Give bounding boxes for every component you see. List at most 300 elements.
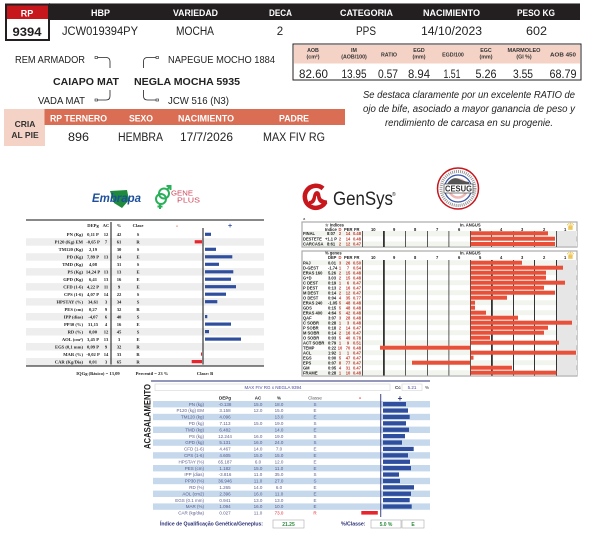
RP badge: RP: [21, 8, 33, 18]
chart: Embrapa Geneplus evaluation: S: [137, 300, 140, 304]
chart: GenSys panel two: 10: [371, 255, 376, 260]
chart: Embrapa Geneplus evaluation: +: [228, 223, 232, 230]
chart: mating projection: 65.187: [218, 459, 232, 464]
chart: mating projection: 5.131: [219, 440, 231, 445]
chart: mating projection: S: [313, 434, 317, 439]
chart: GenSys panel two: TEMP: [303, 345, 315, 350]
chart: GenSys panel two: 0.48: [353, 370, 362, 375]
chart: Embrapa Geneplus evaluation: 4,07 P: [87, 292, 99, 297]
panel: cria al pie: RP TERNERO: [50, 114, 107, 124]
chart: GenSys panel two: ♛: [566, 251, 575, 262]
panel: carcass measurements table: AOB 450: [550, 52, 576, 58]
chart: Embrapa Geneplus evaluation: 32: [117, 307, 122, 312]
chart: GenSys panel two: 2: [339, 275, 342, 280]
chart: mating projection: -0.138: [219, 402, 232, 407]
chart: GenSys panel one: FR: [354, 227, 360, 232]
chart: GenSys panel one: In. ANGUS: [460, 222, 481, 228]
mating chart footer: E: [411, 522, 415, 528]
chart: GenSys panel two: -1.05: [328, 300, 338, 305]
chart: mating projection: PP30 (%): [185, 479, 204, 484]
chart: GenSys panel two: 7: [347, 265, 350, 270]
chart: Embrapa Geneplus evaluation: 3,45 P: [87, 337, 99, 342]
panel: carcass measurements table: [293, 44, 581, 81]
chart: mating projection: [151, 380, 430, 517]
chart: Embrapa Geneplus evaluation: TM120 (Kg): [59, 247, 83, 252]
chart: Embrapa Geneplus evaluation: 13: [104, 254, 109, 260]
chart: GenSys panel two: 0:00: [328, 355, 337, 360]
chart: mating projection: 19.0: [275, 434, 284, 439]
chart: Embrapa Geneplus evaluation: 22: [117, 292, 122, 297]
chart: GenSys panel two: 1:92: [328, 350, 337, 355]
chart: Embrapa Geneplus evaluation: 13: [117, 270, 122, 274]
chart: Embrapa Geneplus evaluation: 4,08: [89, 262, 98, 267]
RP badge: [6, 4, 49, 40]
chart: GenSys panel two: 3:07: [328, 315, 337, 320]
chart: Embrapa Geneplus evaluation: 7: [105, 240, 108, 244]
chart: Embrapa Geneplus evaluation: PS (Kg): [68, 270, 83, 274]
chart: GenSys panel two: ERAS 160: [303, 270, 323, 275]
chart: Embrapa Geneplus evaluation: AC: [103, 223, 109, 228]
chart: Embrapa Geneplus evaluation: -0,65 P: [86, 240, 100, 244]
panel: carcass measurements table: 13.95: [342, 67, 367, 81]
chart: GenSys panel two: 2: [339, 325, 342, 330]
chart: GenSys panel two: DEP: [328, 255, 337, 260]
panel: carcass measurements table: (mm): [413, 54, 426, 60]
text block: note: ojo de bife, asociado a mayor ganancia de peso y: [363, 104, 576, 115]
chart: GenSys panel one: 0.47: [353, 242, 362, 247]
chart: GenSys panel two: 0.54: [353, 265, 362, 270]
chart: mating projection: TM120 (kg): [181, 415, 204, 420]
chart: GenSys panel two: 48: [346, 300, 351, 305]
chart: mating projection: 6.482: [219, 427, 231, 432]
logo: GenSys: ®: [392, 191, 396, 198]
pedigree: REM ARMADOR: [15, 54, 85, 66]
chart: Embrapa Geneplus evaluation: IQGg (Básico) = 13,09: [76, 371, 120, 376]
chart: mating projection: 16.0: [254, 491, 263, 496]
chart: GenSys panel one: FINAL: [303, 231, 316, 236]
chart: Embrapa Geneplus evaluation: 3: [118, 337, 121, 342]
chart: Embrapa Geneplus evaluation: 13: [104, 270, 109, 274]
panel: carcass measurements table: (cm²): [307, 54, 320, 60]
chart: mating projection: 1.094: [219, 504, 231, 509]
chart: mating projection: 27.0: [275, 479, 284, 484]
chart: GenSys panel one: 2: [543, 227, 546, 232]
chart: mating projection: P120 (kg) EM: [176, 408, 204, 413]
panel: carcass measurements table: (AOB/100): [341, 54, 367, 60]
chart: GenSys panel one: DESTETE: [303, 236, 322, 241]
chart: mating projection: S: [313, 421, 317, 426]
chart: mating projection: 12.0: [275, 459, 284, 464]
chart: mating projection: 11.0: [254, 479, 263, 484]
chart: GenSys panel two: PER: [344, 255, 352, 260]
chart: GenSys panel two: 0:13: [328, 285, 337, 290]
chart: Embrapa Geneplus evaluation: 31: [117, 262, 122, 267]
chart: GenSys panel two: FRAME: [303, 370, 318, 375]
chart: mating projection: -3.816: [219, 472, 232, 477]
chart: Embrapa Geneplus evaluation: PP30 (%): [64, 322, 83, 327]
chart: GenSys panel two: 0.47: [353, 365, 362, 370]
chart: Embrapa Geneplus evaluation: PES (cm): [64, 307, 83, 312]
heading: acasalamento: ACASALAMENTO: [142, 384, 154, 449]
panel: carcass measurements table: RATIO: [381, 52, 397, 58]
panel: carcass measurements table: IM: [351, 48, 358, 54]
chart: mating projection: 16.0: [254, 504, 263, 509]
chart: mating projection: 73.0: [275, 511, 284, 516]
panel: carcass measurements table: EGD: [413, 48, 425, 54]
chart: Embrapa Geneplus evaluation: P120 (Kg) EM: [55, 240, 84, 244]
chart: Embrapa Geneplus evaluation: IPP (dias): [64, 314, 83, 320]
chart: Embrapa Geneplus evaluation: 0,01: [89, 360, 98, 364]
chart: Embrapa Geneplus evaluation: S: [137, 232, 140, 237]
chart: Embrapa Geneplus evaluation: 14: [104, 352, 109, 357]
chart: GenSys panel two: 2: [339, 270, 342, 275]
header bar: PESO KG: [517, 8, 555, 18]
chart: mating projection: HPSTAY (%): [178, 459, 204, 464]
chart: Embrapa Geneplus evaluation: E: [136, 322, 140, 327]
chart: GenSys panel two: 0.48: [353, 275, 362, 280]
chart: GenSys panel two: 8: [414, 255, 417, 260]
logo: Gene Plus: PLUS: [177, 196, 200, 204]
chart: Embrapa Geneplus evaluation: 12: [104, 330, 109, 334]
chart: Embrapa Geneplus evaluation: 42: [117, 232, 122, 237]
chart: mating projection: 15.0: [275, 408, 284, 413]
chart: mating projection: Cc :: [395, 385, 404, 390]
chart: mating projection: IPP (dias): [184, 472, 204, 477]
chart: Embrapa Geneplus evaluation: S: [137, 330, 140, 334]
chart: mating projection: 6.0: [255, 459, 262, 464]
chart: GenSys panel two: 1: [339, 280, 342, 285]
chart: mating projection: 15.0: [254, 453, 263, 458]
chart: GenSys panel one: 2: [339, 242, 342, 247]
panel: cria al pie: AL PIE: [11, 130, 39, 140]
chart: Embrapa Geneplus evaluation: 32: [117, 344, 122, 350]
chart: GenSys panel two: GDS: [303, 305, 312, 310]
chart: GenSys panel two: D: [339, 255, 342, 260]
panel: carcass measurements table: EGC: [480, 48, 492, 54]
chart: GenSys panel two: 31: [346, 365, 351, 370]
chart: GenSys panel two: 0.77: [353, 295, 362, 300]
chart: Embrapa Geneplus evaluation: 13: [104, 337, 109, 342]
panel: carcass measurements table: 1.51: [444, 67, 461, 81]
chart: GenSys panel two: 1: [339, 340, 342, 345]
pedigree: JCW 516 (N3): [168, 95, 229, 107]
chart: Embrapa Geneplus evaluation: MAR (%): [63, 352, 83, 357]
chart: GenSys panel two: 0:14: [328, 290, 337, 295]
chart: mating projection: 4.605: [219, 453, 231, 458]
chart: Embrapa Geneplus evaluation: 3: [105, 300, 108, 304]
chart: Embrapa Geneplus evaluation: 3: [105, 360, 108, 364]
chart: GenSys panel two: 0:28: [328, 320, 337, 325]
chart: GenSys panel two: 0.47: [353, 280, 362, 285]
chart: GenSys panel one: 10: [371, 227, 376, 232]
chart: GenSys panel two: C DEST: [303, 280, 319, 285]
chart: GenSys panel one: 0.48: [353, 236, 362, 241]
chart: mating projection: PD (kg): [189, 421, 204, 426]
chart: GenSys panel two: 47: [346, 355, 351, 360]
panel: cria al pie: SEXO: [129, 114, 153, 124]
chart: GenSys panel two: 2: [339, 285, 342, 290]
chart: GenSys panel two: 1: [339, 370, 342, 375]
chart: GenSys panel two: 0.50: [353, 260, 362, 265]
chart: Embrapa Geneplus evaluation: TMD (Kg): [62, 262, 83, 267]
chart: Embrapa Geneplus evaluation: %: [117, 223, 122, 228]
panel: cria al pie: NACIMIENTO: [178, 114, 234, 124]
panel: cria al pie: [4, 109, 345, 146]
chart: Embrapa Geneplus evaluation: -: [176, 224, 178, 230]
chart: mating projection: -: [359, 395, 362, 402]
chart: GenSys panel two: [302, 250, 577, 376]
chart: Embrapa Geneplus evaluation: S: [137, 247, 140, 252]
chart: GenSys panel two: D-GEST: [303, 265, 319, 270]
chart: mating projection: 15.0: [254, 402, 263, 407]
chart: Embrapa Geneplus evaluation: -4,07: [88, 314, 98, 320]
chart: Embrapa Geneplus evaluation: 4,22 P: [87, 284, 99, 290]
panel: carcass measurements table: (GI %): [516, 54, 532, 60]
chart: Embrapa Geneplus evaluation: R: [136, 344, 140, 350]
chart: Embrapa Geneplus evaluation: 45: [117, 330, 122, 334]
chart: mating projection: 5.21: [408, 385, 417, 390]
chart: mating projection: 1.182: [219, 466, 231, 471]
chart: GenSys panel one: 7: [436, 227, 439, 232]
chart: mating projection: 15.0: [254, 466, 263, 471]
chart: mating projection: %: [277, 396, 281, 400]
chart: mating projection: 24.0: [275, 440, 284, 445]
chart: Embrapa Geneplus evaluation: 0,11 P: [87, 232, 99, 237]
panel: carcass measurements table: EGD/100: [442, 52, 464, 58]
chart: mating projection: RD (%): [189, 485, 204, 490]
chart: GenSys panel two: 0:28: [328, 370, 337, 375]
header bar: VARIEDAD: [173, 8, 218, 18]
chart: mating projection: GPD (kg): [185, 440, 204, 445]
chart: Embrapa Geneplus evaluation: S: [137, 292, 140, 297]
chart: mating projection: E: [313, 459, 317, 464]
chart: GenSys panel two: 0:15: [328, 305, 337, 310]
chart: GenSys panel two: 26: [346, 260, 351, 265]
chart: GenSys panel two: 4: [339, 365, 342, 370]
chart: GenSys panel two: 0.48: [353, 300, 362, 305]
chart: GenSys panel two: M SOBR: [303, 330, 319, 335]
chart: GenSys panel two: 77: [346, 360, 351, 365]
chart: Embrapa Geneplus evaluation: GPD (Kg): [63, 277, 83, 282]
chart: mating projection: E: [313, 447, 317, 452]
chart: mating projection: 13.0: [254, 498, 263, 503]
chart: GenSys panel one: 4: [500, 227, 503, 232]
chart: Embrapa Geneplus evaluation: S: [137, 262, 140, 267]
chart: GenSys panel two: 0.47: [353, 330, 362, 335]
chart: mating projection: MAR (%): [186, 504, 204, 509]
chart: Embrapa Geneplus evaluation: E: [136, 284, 140, 290]
chart: Embrapa Geneplus evaluation: PN (Kg): [67, 232, 83, 237]
chart: mating projection: E: [313, 491, 317, 496]
chart: Embrapa Geneplus evaluation: E: [136, 277, 140, 282]
chart: GenSys panel one: 2: [339, 231, 342, 236]
chart: GenSys panel two: 4: [339, 295, 342, 300]
chart: GenSys panel two: 0.48: [353, 270, 362, 275]
chart: GenSys panel two: EGS: [303, 355, 312, 360]
pedigree: NEGLA MOCHA 5935: [134, 76, 240, 88]
chart: GenSys panel two: 3: [339, 315, 342, 320]
chart: mating projection: 7.113: [220, 421, 231, 426]
chart: Embrapa Geneplus evaluation: R: [136, 240, 140, 244]
chart: GenSys panel two: 3.03: [328, 275, 337, 280]
chart: mating projection: 12.244: [218, 434, 232, 439]
chart: mating projection: +: [398, 394, 403, 403]
header bar: HBP: [91, 8, 110, 18]
header values: 602: [526, 26, 547, 38]
chart: mating projection: 36.946: [218, 479, 232, 484]
panel: carcass measurements table: 8.94: [408, 67, 430, 81]
chart: Embrapa Geneplus evaluation: 34,61: [88, 300, 99, 304]
pedigree: CAIAPO MAT: [53, 76, 120, 88]
header values: 14/10/2023: [421, 26, 482, 38]
chart: Embrapa Geneplus evaluation: R: [136, 360, 140, 364]
chart: GenSys panel two: 1: [339, 320, 342, 325]
panel: carcass measurements table: AOB: [307, 48, 319, 54]
chart: Embrapa Geneplus evaluation: 40: [117, 314, 122, 320]
chart: mating projection: AOL (cm2): [182, 491, 204, 496]
chart: GenSys panel two: 6: [458, 255, 461, 260]
header bar: [49, 3, 580, 20]
chart: mating projection: AC: [255, 396, 262, 400]
chart: GenSys panel two: 10: [346, 370, 351, 375]
header values: JCW019394PY: [62, 26, 138, 38]
chart: GenSys panel two: 2: [339, 290, 342, 295]
chart: Embrapa Geneplus evaluation: 30: [117, 247, 122, 252]
chart: GenSys panel two: 42: [346, 310, 351, 315]
chart: mating projection: 11.0: [254, 472, 263, 477]
chart: GenSys panel one: 14: [346, 236, 351, 241]
chart: mating projection: 16.0: [254, 440, 263, 445]
chart: GenSys panel two: M DEST: [303, 290, 319, 295]
chart: GenSys panel two: PAJ: [303, 260, 311, 265]
chart: GenSys panel two: 70: [346, 345, 351, 350]
chart: GenSys panel two: 0:05: [328, 365, 337, 370]
panel: carcass measurements table: MARMOLEO: [508, 48, 540, 54]
chart: mating projection: 35.0: [275, 472, 284, 477]
chart: mating projection: 11.0: [254, 511, 263, 516]
chart: GenSys panel two: 3: [339, 260, 342, 265]
chart: Embrapa Geneplus evaluation: S: [137, 314, 140, 320]
chart: mating projection: 3.158: [219, 408, 231, 413]
chart: mating projection: 18.0: [275, 402, 284, 407]
header bar: DECA: [269, 8, 292, 18]
chart: GenSys panel two: 12: [346, 290, 351, 295]
chart: mating projection: E: [313, 408, 317, 413]
chart: GenSys panel one: +1.1 P: [325, 236, 337, 241]
chart: mating projection: E: [313, 466, 317, 471]
chart: mating projection: 19.0: [275, 421, 284, 426]
chart: GenSys panel one: CARCASA: [303, 242, 324, 247]
chart: mating projection: 10.0: [275, 504, 284, 509]
panel: carcass measurements table: (mm): [480, 54, 493, 60]
chart: GenSys panel two: O SOBR: [303, 335, 319, 340]
header values: 2: [277, 26, 283, 38]
chart: Embrapa Geneplus evaluation: 13: [104, 277, 109, 282]
chart: Embrapa Geneplus evaluation: [26, 220, 264, 376]
chart: GenSys panel two: 0.47: [353, 285, 362, 290]
chart: Embrapa Geneplus evaluation: 16: [117, 322, 122, 327]
chart: GenSys panel two: 5: [339, 355, 342, 360]
chart: Embrapa Geneplus evaluation: 11: [104, 284, 109, 290]
mating chart footer: [160, 520, 424, 528]
chart: GenSys panel two: FR: [354, 255, 360, 260]
chart: Embrapa Geneplus evaluation: R: [136, 307, 140, 312]
panel: cria al pie: 17/7/2026: [180, 132, 233, 144]
chart: Embrapa Geneplus evaluation: 14: [104, 292, 109, 297]
chart: mating projection: E: [313, 504, 317, 509]
chart: mating projection: S: [313, 479, 317, 484]
chart: GenSys panel two: 4:64: [328, 310, 337, 315]
chart: GenSys panel two: 0.47: [353, 355, 362, 360]
chart: mating projection: CAR (kg/dia): [178, 511, 204, 516]
chart: GenSys panel two: 6: [347, 280, 350, 285]
chart: Embrapa Geneplus evaluation: 16: [117, 277, 122, 282]
chart: GenSys panel two: 3: [347, 320, 350, 325]
chart: GenSys panel two: 5: [479, 255, 482, 260]
chart: mating projection: 7.0: [276, 447, 283, 452]
chart: GenSys panel two: 3: [521, 255, 524, 260]
chart: GenSys panel two: 0.47: [353, 325, 362, 330]
chart: GenSys panel two: 9: [347, 340, 350, 345]
pedigree: VADA MAT: [38, 95, 86, 107]
chart: mating projection: E: [313, 485, 317, 490]
chart: mating projection: %: [425, 385, 429, 390]
chart: GenSys panel one: 3: [521, 227, 524, 232]
chart: mating projection: 4.467: [219, 447, 231, 452]
chart: GenSys panel one: ♛: [566, 222, 575, 233]
chart: GenSys panel two: 0:07: [328, 360, 337, 365]
chart: mating projection: 11.0: [275, 466, 284, 471]
chart: mating projection: S: [313, 440, 317, 445]
chart: GenSys panel two: 0:03: [328, 335, 337, 340]
chart: GenSys panel two: 16: [346, 330, 351, 335]
chart: GenSys panel one: 0.48: [353, 231, 362, 236]
chart: GenSys panel two: 35: [346, 295, 351, 300]
panel: cria al pie: CRIA: [15, 119, 35, 129]
chart: Embrapa Geneplus evaluation: 31,15: [88, 322, 99, 327]
chart: GenSys panel two: 0.48: [353, 315, 362, 320]
chart: GenSys panel two: 0.48: [353, 310, 362, 315]
chart: mating projection: E: [313, 427, 317, 432]
chart: Embrapa Geneplus evaluation: EGS (0,1 mm): [55, 344, 83, 350]
chart: GenSys panel one: 8:07: [327, 231, 336, 236]
logo: Gene Plus: [156, 186, 200, 209]
chart: mating projection: 6.0: [276, 485, 283, 490]
pedigree: NAPEGUE MOCHO 1884: [168, 54, 275, 66]
panel: carcass measurements table: 3.55: [513, 67, 533, 81]
chart: GenSys panel two: 5: [339, 300, 342, 305]
chart: GenSys panel one: 8:61: [327, 242, 336, 247]
chart: mating projection: TMD (kg): [185, 427, 204, 432]
chart: GenSys panel two: G+D: [303, 275, 312, 280]
chart: mating projection: E: [313, 498, 317, 503]
chart: GenSys panel two: 28: [346, 315, 351, 320]
logo: Embrapa: Embrapa: [92, 191, 141, 205]
chart: GenSys panel one: D: [339, 227, 342, 232]
chart: GenSys panel one: 6: [458, 227, 461, 232]
chart: GenSys panel two: C SOBR: [303, 320, 319, 325]
panel: carcass measurements table: 5.26: [476, 67, 497, 81]
chart: GenSys panel two: 40: [346, 335, 351, 340]
chart: GenSys panel two: O DEST: [303, 295, 319, 300]
mating chart footer: 21.25: [282, 522, 295, 528]
chart: Embrapa Geneplus evaluation: E: [136, 337, 140, 342]
chart: GenSys panel two: 2: [339, 330, 342, 335]
chart: GenSys panel two: 2: [543, 255, 546, 260]
chart: mating projection: CPS (1-6): [184, 453, 204, 458]
chart: Embrapa Geneplus evaluation: Clase: B: [197, 371, 213, 376]
chart: GenSys panel two: 1: [339, 265, 342, 270]
